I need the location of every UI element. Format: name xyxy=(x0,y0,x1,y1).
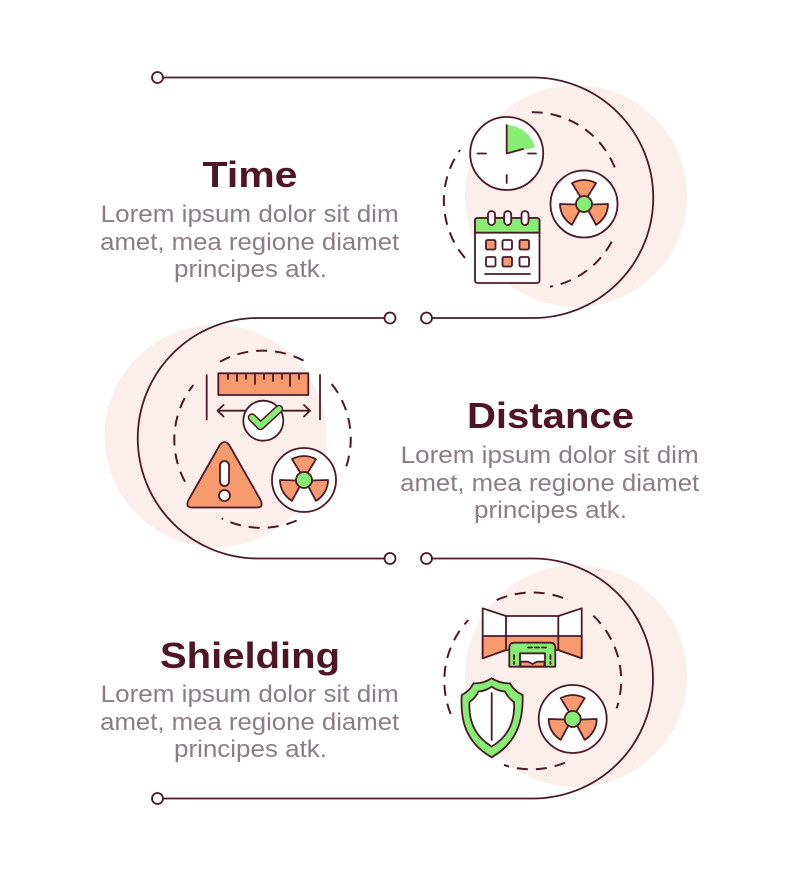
body text: distance: principes atk. xyxy=(474,497,627,524)
body text: time: Lorem ipsum dolor sit dim xyxy=(101,201,399,228)
dashed orbit: shielding xyxy=(444,592,621,769)
icon: radiation xyxy=(272,448,336,512)
icon: radiation xyxy=(539,685,607,753)
body text: time: amet, mea regione diamet xyxy=(100,229,400,256)
body text: distance: amet, mea regione diamet xyxy=(400,470,700,497)
end node: time xyxy=(421,312,432,324)
bottom node: distance xyxy=(384,553,396,564)
icon: ruler with arrow xyxy=(207,373,320,420)
body text: shielding: Lorem ipsum dolor sit dim xyxy=(101,681,399,708)
icon: shield xyxy=(461,678,523,757)
background circle: distance xyxy=(104,325,326,547)
body text: time: principes atk. xyxy=(174,256,327,283)
top node: distance xyxy=(384,312,396,324)
dashed orbit: time xyxy=(444,112,615,287)
body text: distance: Lorem ipsum dolor sit dim xyxy=(401,442,699,469)
start node: time xyxy=(152,72,163,83)
background circle: shielding xyxy=(465,565,687,787)
connector line: distance xyxy=(138,318,384,558)
body text: shielding: principes atk. xyxy=(174,736,327,763)
bottom node: shielding xyxy=(152,793,163,804)
icon: check badge xyxy=(243,401,283,441)
panel: distance xyxy=(104,312,706,564)
top node: shielding xyxy=(421,553,432,564)
connector line: shielding xyxy=(163,558,653,798)
icon: warning triangle xyxy=(187,442,262,508)
panel: shielding xyxy=(100,553,687,804)
heading: distance: Distance xyxy=(467,395,634,436)
heading: time: Time xyxy=(202,154,298,195)
background circle: time xyxy=(465,85,687,307)
icon: shielded room xyxy=(483,608,582,667)
dashed orbit: distance xyxy=(174,351,351,528)
icon: clock xyxy=(470,117,543,190)
heading: shielding: Shielding xyxy=(160,635,340,676)
body text: shielding: amet, mea regione diamet xyxy=(100,709,400,736)
icon: radiation xyxy=(550,170,618,238)
connector line: time xyxy=(163,78,653,318)
icon: calendar xyxy=(475,211,540,283)
panel: time xyxy=(100,72,687,324)
